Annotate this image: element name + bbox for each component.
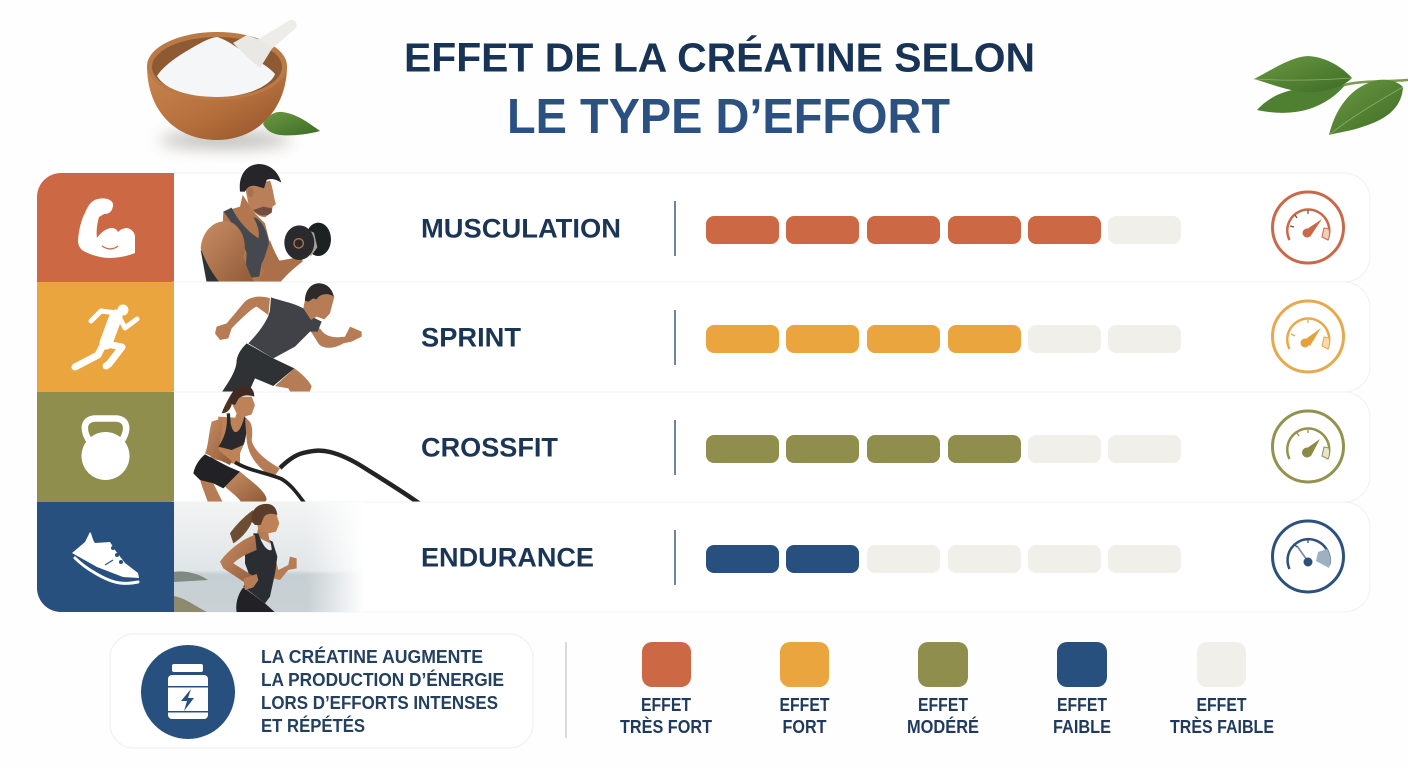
legend item: faible: FAIBLE: [1053, 717, 1111, 737]
icon: flexed biceps: [78, 198, 135, 258]
effect bar: 5 of 6: [706, 216, 1181, 244]
title: [404, 34, 1035, 144]
icon: gauge medium: [1272, 411, 1344, 482]
text: creatine explanation: LA CRÉATINE AUGMENTE: [261, 646, 483, 667]
legend item: très fort: EFFET: [641, 695, 691, 715]
icon: gauge high: [1272, 192, 1344, 263]
photo: sprinter: [215, 283, 362, 393]
color block: musculation: [37, 173, 174, 282]
text: creatine explanation: [261, 646, 504, 736]
effect bar: 4 of 6: [706, 435, 1181, 463]
photo: athlete with dumbbell: [201, 164, 331, 283]
legend item: faible: EFFET: [1057, 695, 1107, 715]
callout: creatine energy card: [110, 634, 533, 748]
icon: gauge low: [1272, 521, 1344, 592]
label: endurance: ENDURANCE: [421, 542, 594, 572]
row: musculation: [37, 164, 1370, 283]
legend item: fort: [780, 642, 830, 737]
photo: woman running by the sea: [174, 502, 364, 612]
photo: woman with battle ropes: [193, 386, 420, 504]
icon: running shoe: [72, 532, 139, 583]
color block: endurance: [37, 502, 174, 612]
icon: runner: [75, 304, 137, 367]
title: LE TYPE D’EFFORT: [507, 90, 950, 144]
legend item: très faible: EFFET: [1196, 695, 1247, 715]
label: sprint: SPRINT: [421, 322, 522, 352]
legend item: très faible: TRÈS FAIBLE: [1170, 716, 1274, 737]
color block: crossfit: [37, 392, 174, 502]
label: crossfit: CROSSFIT: [421, 432, 558, 462]
icon: gauge medium high: [1272, 301, 1344, 372]
illustration: creatine powder bowl: [147, 20, 320, 148]
row: sprint: [37, 282, 1370, 393]
title: EFFET DE LA CRÉATINE SELON: [404, 34, 1035, 80]
legend item: fort: FORT: [782, 717, 826, 737]
legend item: modéré: MODÉRÉ: [907, 716, 979, 737]
illustration: green leaves: [1254, 56, 1408, 135]
effect bar: 2 of 6: [706, 545, 1181, 573]
legend item: très fort: TRÈS FORT: [620, 716, 712, 737]
icon: supplement jar with bolt: [141, 645, 235, 739]
label: musculation: MUSCULATION: [421, 214, 621, 244]
icon: kettlebell: [82, 418, 130, 480]
legend item: faible: [1053, 642, 1111, 737]
legend item: très faible: [1170, 642, 1274, 737]
text: creatine explanation: LORS D’EFFORTS INTENSES: [261, 692, 498, 713]
legend item: très fort: [620, 642, 712, 737]
legend item: fort: EFFET: [780, 695, 830, 715]
effect bar: 4 of 6: [706, 325, 1181, 353]
text: creatine explanation: ET RÉPÉTÉS: [261, 715, 365, 736]
row: crossfit: [37, 386, 1370, 504]
text: creatine explanation: LA PRODUCTION D’ÉNERGIE: [261, 669, 504, 690]
legend: [620, 642, 1274, 737]
legend item: modéré: EFFET: [918, 695, 968, 715]
legend item: modéré: [907, 642, 979, 737]
color block: sprint: [37, 282, 174, 392]
row: endurance: [37, 502, 1370, 612]
